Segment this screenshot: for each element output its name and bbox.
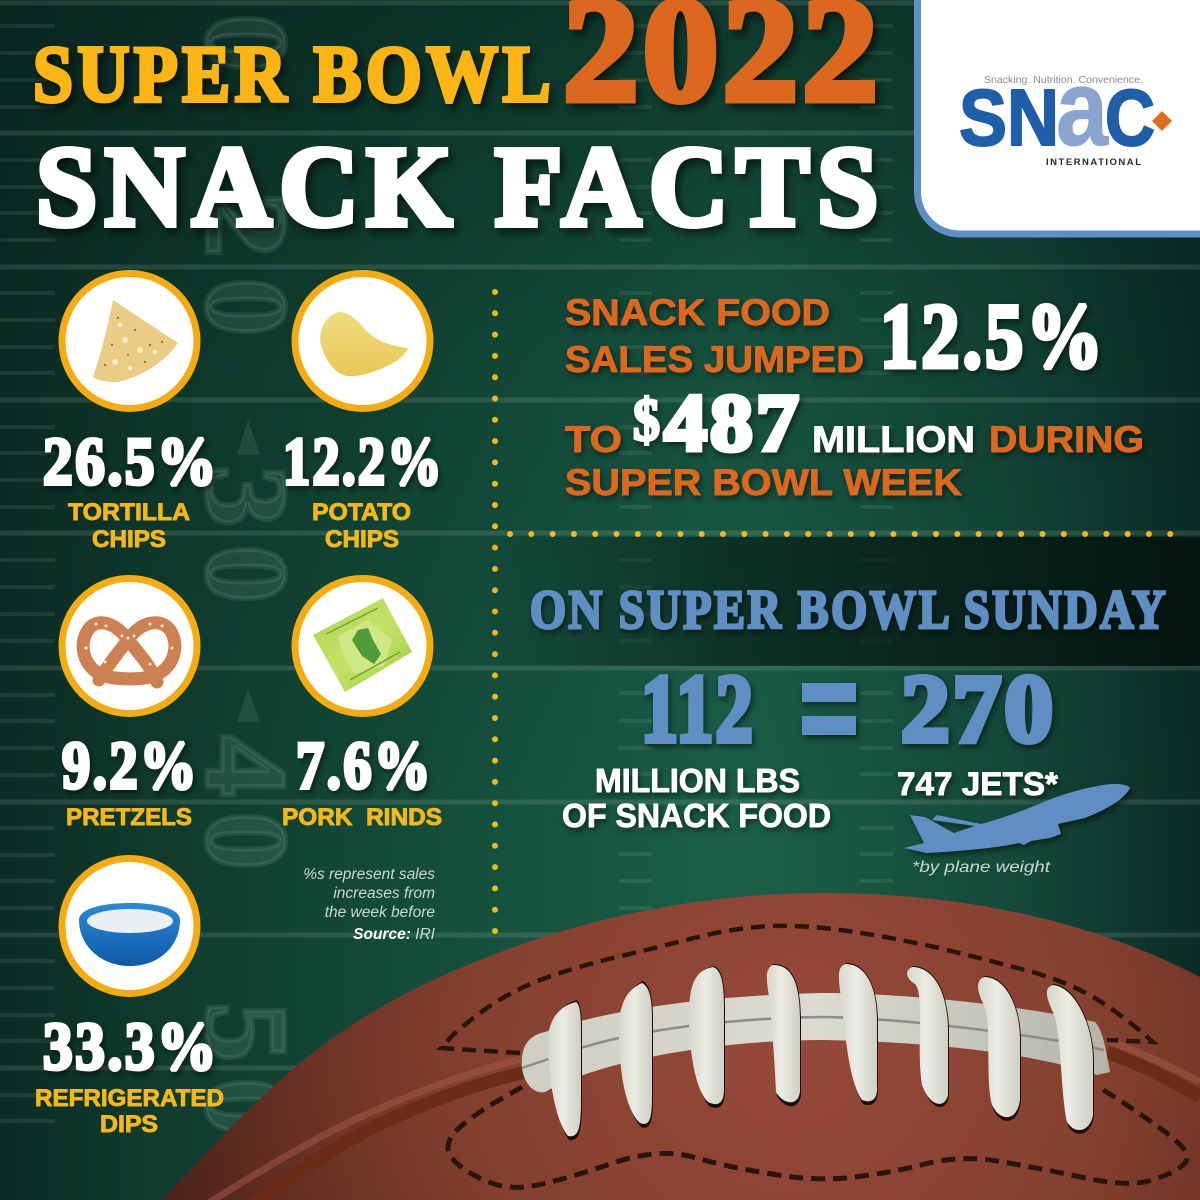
label line 2: CHIPS [325, 526, 399, 553]
icon: tortilla chip [62, 274, 197, 408]
label line 2: CHIPS [92, 526, 166, 553]
lace: crossing stitches [548, 963, 1094, 1140]
text: snack food: SNACK FOOD [565, 292, 830, 333]
yard numbers on the field [181, 14, 312, 1136]
dark band behind Super Bowl Sunday [480, 537, 1200, 666]
yard numbers on the field: 0 [181, 1078, 312, 1136]
dotted dividers [495, 292, 1175, 940]
text: of snack food: OF SNACK FOOD [562, 797, 831, 834]
yard numbers on the field: 4 [181, 735, 312, 797]
footnote: source: %s represent sales [303, 866, 435, 883]
footnote: source [303, 866, 436, 943]
logo panel [918, 0, 1200, 234]
icon: bowl of dip [62, 858, 197, 994]
text: million lbs: MILLION LBS [595, 762, 800, 799]
label: PORK RINDS [282, 804, 442, 831]
logo wordmark: SN [959, 73, 1059, 162]
football [155, 893, 1200, 1200]
logo wordmark: C [1105, 73, 1155, 162]
value: 9.2% [62, 727, 199, 803]
text: sales jumped: SALES JUMPED [565, 339, 864, 380]
value: 112: 112 [641, 655, 755, 762]
footnote: source: the week before [325, 904, 435, 921]
lower stitching [448, 1087, 1187, 1187]
stat: tortilla chips [43, 274, 219, 553]
value: dollar sign: $ [633, 387, 660, 453]
value: 12.5%: 12.5% [880, 285, 1106, 387]
stat: pork rinds [282, 578, 442, 831]
logo wordmark [959, 47, 1155, 168]
footnote: source: Source: IRI [353, 926, 436, 943]
value: 270: 270 [901, 655, 1056, 762]
label: POTATO [312, 499, 411, 526]
ball body [155, 893, 1200, 1200]
icon: pretzel [62, 578, 197, 714]
stat: sales jumped [565, 285, 1144, 503]
heading: Snack Facts: SNACK FACTS [36, 123, 886, 250]
logo wordmark: a [1056, 47, 1109, 168]
stat: pretzels [62, 578, 199, 831]
yard numbers on the field: 3 [181, 465, 312, 527]
yard numbers on the field: 0 [181, 14, 312, 72]
yard numbers on the field: 0 [181, 278, 312, 336]
value: 26.5% [43, 423, 219, 499]
heading: Super Bowl: SUPER BOWL [33, 31, 555, 119]
text: to: TO [565, 419, 622, 460]
stat: potato chips [283, 274, 444, 553]
stat: 112 million lbs equals 270 jets [562, 655, 1130, 876]
text: 747 jets: 747 JETS* [897, 766, 1059, 802]
icon: airplane [904, 784, 1130, 853]
icon: potato chip [295, 274, 430, 408]
label: REFRIGERATED [35, 1085, 224, 1112]
yard numbers on the field: 5 [181, 1002, 312, 1062]
logo diamond [1152, 111, 1172, 131]
equals sign [802, 683, 856, 735]
footnote: by plane weight: *by plane weight [912, 859, 1051, 876]
value: 12.2% [283, 423, 444, 499]
upper stitching [441, 926, 1153, 1053]
value: 487: 487 [664, 377, 802, 468]
label: TORTILLA [68, 499, 190, 526]
stat: refrigerated dips [35, 858, 224, 1138]
icon: pork rinds bag [295, 578, 430, 714]
title [33, 0, 886, 250]
logo tagline: Snacking. Nutrition. Convenience. [984, 74, 1143, 86]
seam [205, 1040, 1200, 1200]
lace: center band [522, 993, 1110, 1092]
yard numbers on the field: 2 [181, 190, 312, 258]
value: 33.3% [43, 1008, 219, 1084]
label: PRETZELS [66, 804, 192, 831]
text: million: MILLION [812, 419, 975, 460]
label line 2: DIPS [100, 1111, 158, 1138]
value: 7.6% [296, 727, 433, 803]
logo international: INTERNATIONAL [1046, 157, 1141, 168]
text: super bowl week: SUPER BOWL WEEK [565, 462, 962, 503]
yard numbers on the field: 0 [181, 812, 312, 870]
footnote: source: increases from [333, 885, 435, 902]
yard numbers on the field: 0 [181, 545, 312, 603]
text: during: DURING [989, 419, 1144, 460]
